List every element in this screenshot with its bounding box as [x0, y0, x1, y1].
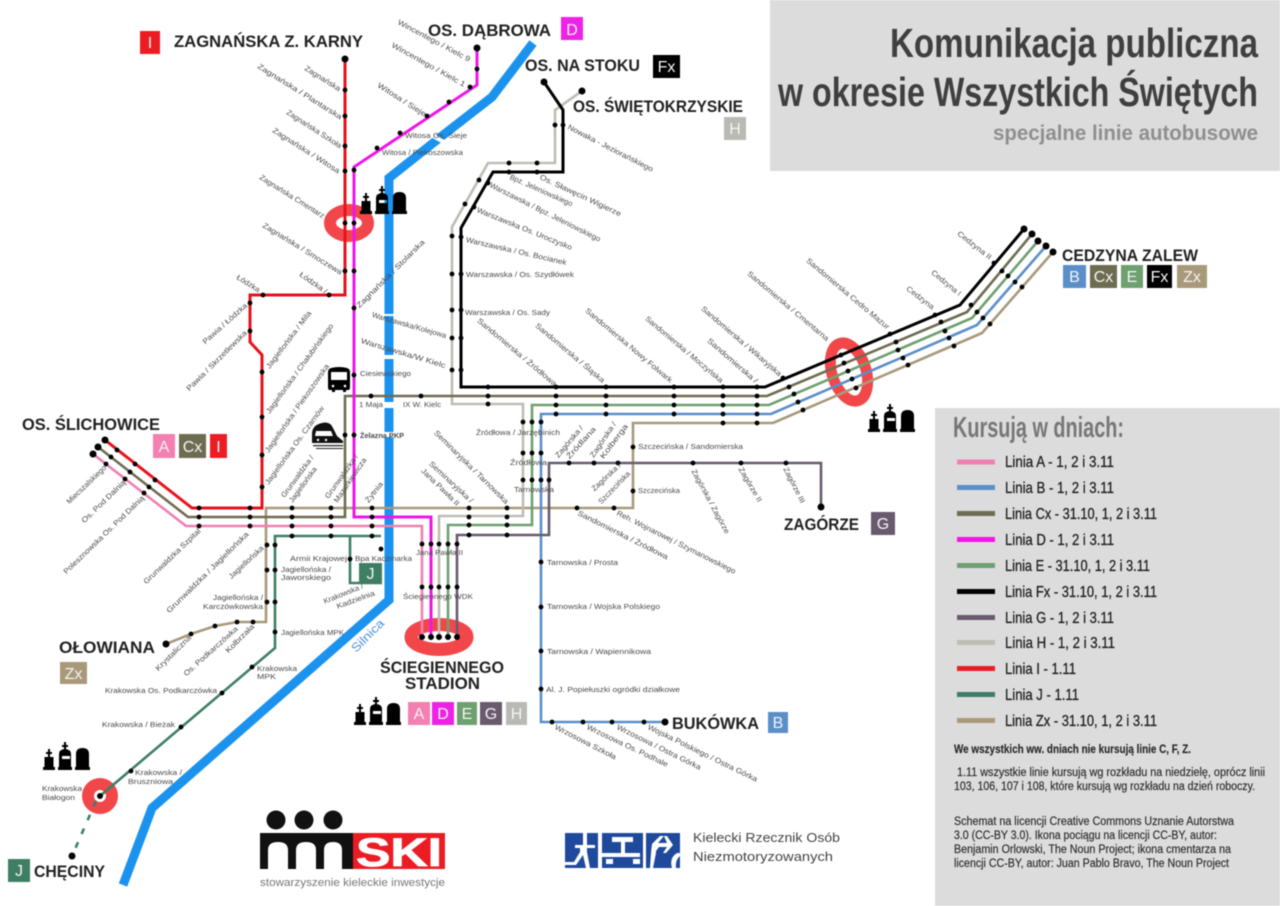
labels: city centre: Warszawska/Kolejowa — [371, 310, 448, 340]
terminus: Os. Ślichowice: I — [216, 439, 221, 456]
labels: Warszawska: Os. Sławęcin Wigierze — [538, 172, 623, 218]
labels: Zagórska, Szczecińska, Tarnowska, Wrzosowa: Zagórze III — [781, 466, 807, 505]
labels: Pawia, Jagiellońska, Grunwaldzka: Jagiellońska / Piekoszowska — [263, 362, 332, 454]
labels: Krakowska, Ołowiana: Białogon — [42, 793, 75, 802]
legend entries: Linia J - 1.11 — [1005, 687, 1079, 704]
labels: Sandomierska and Cedzyna: Sandomierska / Wikaryjska — [699, 304, 784, 379]
bus lines — [72, 48, 1053, 856]
labels: Pawia, Jagiellońska, Grunwaldzka: Os. Pod Dalnią — [80, 477, 128, 525]
labels: Sandomierska and Cedzyna: Sandomierska / Cmentarna — [745, 269, 832, 344]
terminus: Os. Ślichowice — [22, 415, 227, 458]
station labels — [42, 18, 993, 802]
labels: Krakowska, Ołowiana: Kolbrzała — [223, 622, 257, 655]
labels: city centre: Seminaryjska / Tarnowska — [432, 428, 511, 506]
labels: Zagórska, Szczecińska, Tarnowska, Wrzosowa: Tarnowska / Wojska Polskiego — [547, 602, 660, 611]
labels: Pawia, Jagiellońska, Grunwaldzka — [62, 301, 386, 615]
labels: Sandomierska and Cedzyna: Sandomierska / Źródłowa — [475, 316, 559, 389]
labels: Pawia, Jagiellońska, Grunwaldzka: Jagiellońska Os. Czarnów — [263, 404, 326, 486]
labels: Zagórska, Szczecińska, Tarnowska, Wrzosowa: Zagórska / — [553, 423, 586, 460]
labels: city centre: Kadzielnia — [335, 588, 377, 611]
licence note — [954, 816, 1235, 870]
labels: Sandomierska and Cedzyna: Sandomierska Nowy Folwark — [583, 306, 674, 385]
legend entries: Linia Cx - 31.10, 1, 2 i 3.11 — [1005, 506, 1157, 523]
terminus: Ołowiana: Zx — [65, 666, 82, 683]
icon: train — [312, 423, 343, 449]
line E — [448, 241, 1038, 637]
line J — [100, 536, 382, 796]
badge: J at Bpa Kaczmarka: J — [366, 566, 374, 583]
labels: Zagnańska and Łódzka: Łódzka — [235, 273, 262, 295]
line Zx — [166, 252, 1053, 644]
terminus: Ściegiennego Stadion — [380, 658, 527, 725]
labels: Zagnańska and Łódzka: Zagnańska — [303, 64, 343, 94]
labels: Zagórska, Szczecińska, Tarnowska, Wrzosowa: Zagórska / — [588, 419, 619, 459]
cemetery stop highlights — [88, 210, 874, 808]
terminus: Os. Ślichowice: A — [159, 439, 170, 456]
icon: cemetery at Zagnańska — [360, 186, 407, 214]
labels: Sandomierska and Cedzyna: Sandomierska / Śląska — [533, 321, 607, 385]
labels: Zagórska, Szczecińska, Tarnowska, Wrzosowa: Szczecińska — [596, 469, 633, 506]
terminus: Cedzyna Zalew: E — [1127, 269, 1137, 286]
terminus: Ściegiennego Stadion: H — [511, 706, 522, 723]
legend entries: Linia Fx - 31.10, 1, 2 i 3.11 — [1005, 584, 1157, 601]
logo: Kielecki Rzecznik Osób Niezmotoryzowanych — [565, 830, 840, 868]
terminus: Os. Dąbrowa: OS. DĄBROWA — [428, 22, 551, 40]
labels: Pawia, Jagiellońska, Grunwaldzka: Jagiellońska — [227, 543, 266, 581]
terminus: Cedzyna Zalew: Fx — [1151, 269, 1168, 286]
labels: Zagórska, Szczecińska, Tarnowska, Wrzosowa: Zagórze II — [737, 465, 764, 504]
line D — [354, 48, 477, 637]
labels: Sandomierska and Cedzyna: Cedzyna I — [929, 268, 963, 298]
licence note: Schemat na licencji Creative Commons Uznanie Autorstwa — [954, 816, 1235, 828]
labels: Sandomierska and Cedzyna: Sandomierska Cedro Mazur — [804, 256, 892, 332]
labels: Zagórska, Szczecińska, Tarnowska, Wrzosowa: Wrzosowa / Ostra Górka — [615, 723, 703, 772]
labels: Zagórska, Szczecińska, Tarnowska, Wrzosowa: Tarnowska / Prosta — [547, 558, 619, 567]
labels: city centre: Tarnowska — [514, 485, 555, 494]
labels: Sandomierska and Cedzyna: Sandomierska / Moczyńska — [643, 314, 726, 385]
terminus: Os. Dąbrowa — [428, 17, 583, 40]
labels: Warszawska: Warszawska / Os. Bocianek — [465, 235, 568, 267]
labels: city centre: Zagnańska / Stolarska — [354, 237, 427, 310]
labels: Pawia, Jagiellońska, Grunwaldzka: Pawia / Skrzetlewska — [184, 328, 249, 393]
terminus: Ściegiennego Stadion: D — [437, 706, 449, 723]
legend entries: Linia Zx - 31.10, 1, 2 i 3.11 — [1005, 713, 1157, 730]
labels: Zagórska, Szczecińska, Tarnowska, Wrzosowa: Wojska Polskiego / Ostra Górka — [646, 722, 760, 784]
terminus: Os. Dąbrowa: D — [566, 22, 578, 39]
terminus: Os. Świętokrzyskie: H — [729, 121, 741, 138]
labels: Pawia, Jagiellońska, Grunwaldzka: Grunwaldzka Szpital — [142, 526, 203, 586]
legend notes: We wszystkich ww. dniach nie kursują linie C, F, Z. — [954, 744, 1191, 756]
labels: Zagórska, Szczecińska, Tarnowska, Wrzosowa: Tarnowska / Wapiennikowa — [547, 647, 652, 656]
labels: Zagórska, Szczecińska, Tarnowska, Wrzosowa: Źródlana — [564, 424, 598, 461]
labels: Pawia, Jagiellońska, Grunwaldzka: Jagiellońska / Mila — [264, 308, 314, 370]
labels: Zagórska, Szczecińska, Tarnowska, Wrzosowa: Kolberga — [598, 421, 631, 460]
labels: Warszawska — [465, 123, 655, 317]
labels: Sandomierska and Cedzyna: Cedzyna — [905, 284, 937, 312]
terminus: Zagnańska Z. Karny — [140, 31, 363, 54]
line I — [105, 59, 345, 508]
legend entries: Linia I - 1.11 — [1005, 661, 1076, 678]
terminus: Zagórze — [784, 512, 895, 535]
labels: Krakowska, Ołowiana: Krakowska / Bieżak — [102, 720, 175, 729]
icon: bus — [328, 367, 350, 392]
labels: Warszawska: Warszawska Os. Uroczysko — [476, 205, 573, 252]
terminus: Zagnańska Z. Karny: ZAGNAŃSKA Z. KARNY — [174, 32, 363, 51]
labels: Krakowska, Ołowiana — [42, 622, 298, 802]
logo: Kielecki Rzecznik Osób Niezmotoryzowanych: Niezmotoryzowanych — [693, 849, 833, 864]
labels: Zagnańska and Łódzka: Witosa / Piekoszowska — [382, 148, 464, 157]
terminus: Os. Świętokrzyskie: OS. ŚWIĘTOKRZYSKIE — [573, 97, 743, 116]
labels: city centre: Warszawska/W Kielc — [360, 336, 447, 370]
labels: Zagnańska and Łódzka: Łódzka / — [298, 270, 330, 296]
labels: Zagórska, Szczecińska, Tarnowska, Wrzosowa — [546, 419, 807, 784]
terminus: Ściegiennego Stadion: ŚCIEGIENNEGO — [380, 658, 504, 677]
legend entries: Linia H - 1, 2 i 3.11 — [1005, 635, 1115, 652]
line A — [93, 454, 422, 637]
labels: Pawia, Jagiellońska, Grunwaldzka: Polesznowska Os. Pod Dalnią — [62, 493, 147, 576]
terminus: Ołowiana: OŁOWIANA — [59, 639, 155, 657]
labels: city centre: Seminaryjska / — [427, 459, 476, 506]
line H — [439, 91, 582, 637]
terminus: Cedzyna Zalew: Zx — [1183, 269, 1201, 286]
labels: city centre: Jagiellońska / — [213, 593, 264, 602]
labels: Krakowska, Ołowiana: Krakowska — [257, 664, 298, 673]
labels: city centre: Ciesiewskiego — [360, 369, 411, 378]
labels: Zagnańska and Łódzka — [235, 18, 472, 296]
labels: Pawia, Jagiellońska, Grunwaldzka: Grunwaldzka / — [323, 452, 361, 500]
title panel — [770, 0, 1280, 171]
legend notes: 1.11 wszystkie linie kursują wg rozkładu na niedzielę, oprócz linii — [957, 767, 1265, 779]
terminus: Ściegiennego Stadion: STADION — [405, 675, 480, 693]
terminus: Cedzyna Zalew: Cx — [1094, 269, 1113, 286]
labels: Krakowska, Ołowiana: Krakowska Os. Podkarczówka — [105, 686, 218, 695]
labels: Warszawska: Nowaka - Jeziorańskiego — [566, 123, 655, 174]
labels: Zagórska, Szczecińska, Tarnowska, Wrzosowa: Reh. Wojnarowej / Szymanowskiego — [615, 509, 737, 576]
labels: Zagnańska and Łódzka: Zagnańska / Plantarska — [256, 62, 345, 122]
terminus: Bukówka: B — [773, 715, 783, 732]
legend entries — [1005, 454, 1157, 730]
labels: Krakowska, Ołowiana: MPK — [257, 672, 276, 681]
logo: SKI: stowarzyszenie kieleckie inwestycje — [260, 877, 445, 889]
labels: Warszawska: Warszawska / Os. Sady — [465, 308, 550, 317]
labels: city centre: Krakowska / — [322, 581, 365, 606]
labels: Pawia, Jagiellońska, Grunwaldzka: Żytnia — [363, 479, 386, 504]
labels: city centre: Jagiellońska / — [281, 565, 332, 574]
labels: Warszawska: Warszawska / Os. Szydłówek — [466, 270, 574, 279]
labels: Sandomierska and Cedzyna — [475, 229, 993, 389]
line B — [541, 246, 1046, 722]
terminus: Os. Na Stoku: OS. NA STOKU — [525, 57, 640, 75]
icon: cemetery at stadium — [354, 697, 401, 725]
labels: city centre: Ściegiennego WDK — [403, 592, 473, 601]
river label: Silnica — [348, 616, 387, 655]
labels: Zagórska, Szczecińska, Tarnowska, Wrzosowa: Zagórska / Zagórze — [689, 468, 732, 535]
licence note: Benjamin Orlowski, The Noun Project; ikona cmentarza na — [954, 844, 1232, 856]
terminus stops at stadium and Białogon — [100, 637, 457, 796]
labels: Zagórska, Szczecińska, Tarnowska, Wrzosowa: Szczecińska / Sandomierska — [638, 442, 744, 451]
labels: Zagnańska and Łódzka: Witosa Os. Sieje — [405, 131, 467, 140]
labels: Zagnańska and Łódzka: Zagnańska Szkoła — [285, 108, 344, 151]
labels: Krakowska, Ołowiana: Krystaliczna — [153, 633, 194, 673]
terminus: Bukówka: BUKÓWKA — [672, 714, 759, 733]
labels: Zagórska, Szczecińska, Tarnowska, Wrzosowa: Al. J. Popiełuszki ogródki działkowe — [546, 685, 680, 694]
labels: Pawia, Jagiellońska, Grunwaldzka: Pawia / Łódzka — [201, 301, 250, 346]
labels: city centre: Źródłowa / Jarzębinich — [476, 428, 560, 437]
labels: Zagórska, Szczecińska, Tarnowska, Wrzosowa: Wrzosowa Os. Podhale — [585, 722, 670, 769]
legend entries: Linia A - 1, 2 i 3.11 — [1005, 454, 1114, 471]
subtitle: specjalne linie autobusowe — [993, 122, 1258, 145]
terminus: Ściegiennego Stadion: A — [414, 706, 425, 723]
labels: Warszawska: Bpz. Jeleniowskiego — [508, 172, 574, 208]
labels: Zagnańska and Łódzka: Wincentego / Kielc 9 — [396, 18, 472, 64]
labels: city centre: Karczówkowska — [203, 602, 264, 611]
terminus: Bukówka — [672, 712, 788, 733]
labels: Pawia, Jagiellońska, Grunwaldzka: Grunwaldzka / Jagiellońska — [164, 529, 251, 615]
logo: SKI — [260, 810, 445, 889]
terminus: Ołowiana — [59, 639, 155, 684]
labels: Zagnańska and Łódzka: Wincentego / Kielc 1 — [390, 41, 467, 89]
labels: Zagnańska and Łódzka: Zagnańska / Witosa — [271, 126, 342, 176]
terminus: Zagnańska Z. Karny: I — [148, 35, 152, 52]
legend heading: Kursują w dniach: — [953, 412, 1124, 444]
labels: Sandomierska and Cedzyna: Cedzyna II — [956, 229, 993, 261]
legend swatches — [957, 460, 995, 723]
labels: Warszawska: Warszawska / Bpz. Jeleniowskiego — [488, 181, 602, 244]
licence note: 3.0 (CC-BY 3.0). Ikona pociągu na licencji CC-BY, autor: — [954, 830, 1217, 842]
labels: city centre: IX W. Kielc — [403, 400, 441, 409]
labels: city centre: Źródłowa — [510, 458, 548, 467]
logo: SKI: SKI — [356, 831, 442, 875]
terminus: Os. Na Stoku — [525, 55, 680, 78]
labels: Zagórska, Szczecińska, Tarnowska, Wrzosowa: Wrzosowa Szkoła — [553, 723, 619, 762]
labels: Pawia, Jagiellońska, Grunwaldzka: Mazurkiewicza — [332, 455, 369, 504]
labels: city centre: Żelazna PKP — [360, 431, 404, 440]
stops — [72, 48, 1053, 856]
legend notes: 103, 106, 107 i 108, które kursują wg rozkładu na dzień roboczy. — [954, 781, 1255, 793]
labels: Zagórska, Szczecińska, Tarnowska, Wrzosowa: Szczecińska — [638, 486, 681, 495]
terminus: Zagórze: ZAGÓRZE — [784, 515, 859, 534]
labels: Zagnańska and Łódzka: Zagnańska / Smoczewa — [261, 221, 345, 277]
licence note: licencji CC-BY, autor: Juan Pablo Bravo, The Noun Project — [954, 858, 1230, 870]
labels: Krakowska, Ołowiana: Krakowska / — [135, 768, 183, 777]
legend entries: Linia E - 31.10, 1, 2 i 3.11 — [1005, 558, 1150, 575]
terminus: Cedzyna Zalew: CEDZYNA ZALEW — [1062, 247, 1198, 265]
terminus: Chęciny — [8, 859, 105, 882]
labels: Sandomierska and Cedzyna: Sandomierska / — [705, 336, 760, 386]
labels: city centre: Jana Pawła II — [416, 548, 463, 557]
terminal stops — [72, 48, 1053, 856]
legend entries: Linia B - 1, 2 i 3.11 — [1005, 480, 1114, 497]
line Cx — [98, 234, 1032, 517]
terminus: Ściegiennego Stadion: E — [462, 706, 472, 723]
badge: J at Bpa Kaczmarka — [359, 563, 382, 583]
icon: cemetery at Sandomierska — [868, 404, 915, 432]
legend notes — [954, 744, 1265, 793]
labels: Krakowska, Ołowiana: Os. Podkarczówka — [182, 624, 240, 678]
labels: Zagórska, Szczecińska, Tarnowska, Wrzosowa: Sandomierska / Źródłowa — [576, 509, 671, 562]
labels: city centre: 1 Maja — [359, 400, 384, 409]
line J dashed extension — [72, 801, 96, 856]
logo glyph: pedestrian, bicycle and road arrows — [565, 833, 680, 868]
terminus: Chęciny: CHĘCINY — [34, 863, 105, 881]
line G — [457, 463, 821, 637]
labels: city centre: Jaworskiego — [281, 573, 331, 582]
terminus: Os. Ślichowice: OS. ŚLICHOWICE — [22, 415, 160, 434]
labels: Zagnańska and Łódzka: Zagnańska Cmentarz — [258, 173, 326, 220]
labels: Zagórska, Szczecińska, Tarnowska, Wrzosowa: Zagórska / — [590, 460, 623, 493]
labels: Pawia, Jagiellońska, Grunwaldzka: Jagiellońska — [287, 464, 319, 504]
terminus: Os. Świętokrzyskie — [573, 97, 746, 140]
terminus: Zagórze: G — [877, 516, 889, 533]
logo: Kielecki Rzecznik Osób Niezmotoryzowanych: Kielecki Rzecznik Osób — [693, 830, 840, 845]
terminus: Os. Ślichowice: Cx — [183, 439, 202, 456]
labels: city centre: Jana Pawła II — [419, 466, 461, 508]
labels: Krakowska, Ołowiana: Bruszniowa — [128, 777, 174, 786]
river: Silnica — [123, 43, 533, 885]
terminus: Cedzyna Zalew: B — [1069, 269, 1080, 286]
labels: city centre: Bpa Kaczmarka — [355, 554, 413, 563]
legend entries: Linia D - 1, 2 i 3.11 — [1005, 532, 1114, 549]
legend panel — [935, 408, 1280, 906]
labels: city centre: Jagiellońska MPK — [281, 628, 344, 637]
labels: Krakowska, Ołowiana: Krakowska — [42, 784, 83, 793]
labels: city centre: Armii Krajowej — [290, 554, 347, 563]
legend entries: Linia G - 1, 2 i 3.11 — [1005, 610, 1114, 627]
labels: Zagnańska and Łódzka: Witosa / Sieje — [376, 81, 428, 118]
labels: Pawia, Jagiellońska, Grunwaldzka: Jagiellońska / Chałubińskiego — [264, 322, 335, 415]
labels: Pawia, Jagiellońska, Grunwaldzka: Grunwaldzka / — [279, 453, 316, 499]
terminus: Cedzyna Zalew — [1062, 247, 1207, 288]
terminus: Os. Na Stoku: Fx — [658, 59, 675, 76]
terminus: Ściegiennego Stadion: G — [485, 706, 497, 723]
labels: city centre — [203, 237, 560, 637]
line Fx — [461, 82, 1024, 387]
icon: cemetery at Białogon — [43, 742, 90, 770]
terminus: Chęciny: J — [15, 863, 23, 880]
labels: Pawia, Jagiellońska, Grunwaldzka: Miecszalskiego — [65, 463, 108, 506]
